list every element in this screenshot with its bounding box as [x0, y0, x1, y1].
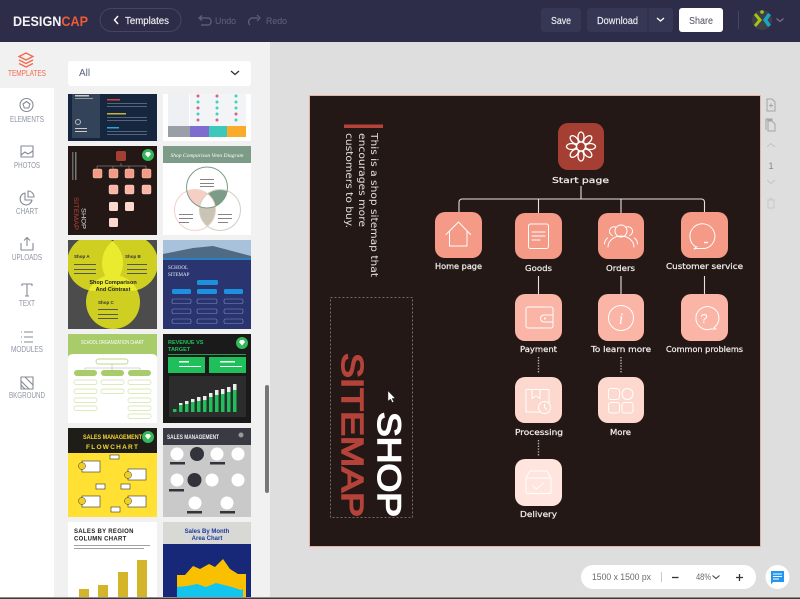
button: download — [587, 8, 673, 32]
button: undo — [199, 16, 236, 27]
title: SITEMAP: SITEMAP — [335, 353, 370, 517]
accent bar — [344, 124, 383, 128]
node: customer service — [666, 212, 743, 271]
button: share: Share — [689, 16, 713, 27]
bottom edge — [0, 598, 800, 599]
button: zoom out — [672, 576, 678, 578]
description text: encourages more — [356, 133, 367, 227]
template: sales management flowchart: SALES MANAGEMENT — [83, 434, 142, 441]
template: yellow shop comparison: Shop C — [98, 300, 114, 305]
nav: text: TEXT — [19, 299, 35, 308]
node: home page — [435, 212, 482, 271]
node: goods: Goods — [525, 264, 552, 273]
nav: text — [19, 284, 35, 308]
template: venn diagram: Shop Comparison Venn Diagram — [171, 153, 243, 159]
nav: templates: TEMPLATES — [8, 69, 46, 78]
nav: modules — [11, 332, 43, 354]
template: sales management gray: SALES MANAGEMENT — [167, 435, 219, 441]
template: sales management flowchart — [68, 428, 157, 517]
node: common problems — [666, 294, 743, 354]
nav: photos — [14, 146, 40, 170]
nav: background — [9, 377, 45, 400]
tool: duplicate page — [766, 119, 775, 131]
template: venn diagram — [163, 146, 251, 235]
nav: templates — [8, 53, 46, 78]
template: comparison table — [163, 94, 251, 141]
template: school organization chart — [68, 334, 157, 423]
nav: modules: MODULES — [11, 345, 43, 354]
node: processing: Processing — [515, 428, 563, 437]
nav: background: BKGROUND — [9, 391, 45, 400]
tool: delete page — [767, 198, 775, 208]
button: share — [679, 8, 723, 32]
node: common problems: ? — [700, 311, 708, 326]
template: sales by region column chart: SALES BY REGION — [74, 529, 134, 535]
node: goods — [515, 213, 562, 273]
template: sales by month area chart — [163, 522, 251, 597]
node: more: More — [610, 428, 631, 437]
template: sales by month area chart: Sales By Month — [185, 529, 230, 535]
node: home page: Home page — [435, 262, 482, 271]
node: orders — [598, 213, 644, 273]
template: yellow shop comparison: Shop A — [74, 254, 90, 259]
template: yellow shop comparison — [68, 240, 157, 329]
template: revenue vs target: REVENUE VS — [168, 340, 204, 346]
page number: 1 — [768, 161, 774, 172]
node: processing — [515, 377, 563, 437]
design canvas — [310, 96, 760, 546]
nav: photos: PHOTOS — [14, 161, 40, 170]
nav: uploads: UPLOADS — [12, 253, 42, 262]
button: zoom in — [736, 574, 743, 581]
template: school sitemap: SITEMAP — [168, 273, 190, 278]
button: save — [541, 8, 581, 32]
nav: elements: ELEMENTS — [10, 115, 44, 124]
user avatar — [752, 10, 784, 30]
sidebar navigation — [0, 42, 54, 597]
node: orders: Orders — [606, 264, 635, 273]
node: more — [598, 377, 644, 437]
node: payment — [515, 294, 562, 354]
chat button — [766, 565, 790, 589]
nav: elements — [10, 98, 44, 124]
filter dropdown: All — [79, 68, 90, 79]
button: redo — [249, 15, 287, 27]
template: shop sitemap thumbnail — [68, 146, 157, 235]
node: common problems: Common problems — [666, 345, 743, 354]
button: download: Download — [597, 15, 638, 27]
panel scrollbar — [265, 385, 269, 493]
template: yellow shop comparison: Shop B — [125, 254, 141, 259]
node: start page — [552, 123, 609, 185]
selection box — [330, 298, 412, 518]
tool: page down — [767, 180, 775, 184]
icon: flower — [566, 132, 596, 161]
button: back to templates — [100, 8, 181, 32]
template: shop sitemap thumbnail: SHOP — [80, 208, 86, 229]
template: dark navy — [68, 94, 157, 141]
template: sales management flowchart: FLOWCHART — [86, 444, 138, 451]
zoom control — [581, 565, 756, 589]
button: undo: Undo — [215, 16, 236, 27]
button: redo: Redo — [266, 16, 287, 27]
filter dropdown — [68, 61, 251, 86]
node: to learn more: To learn more — [590, 345, 651, 354]
nav: uploads — [12, 238, 42, 262]
template: sales by region column chart: COLUMN CHART — [74, 536, 127, 542]
template: revenue vs target — [163, 334, 251, 423]
template: sales by month area chart: Area Chart — [192, 536, 222, 542]
top bar — [0, 0, 800, 42]
template: sales management gray — [163, 428, 251, 517]
node: delivery: Delivery — [520, 510, 557, 519]
connector lines — [459, 186, 704, 456]
canvas tools — [766, 99, 775, 208]
template: school sitemap: SCHOOL — [168, 266, 188, 271]
template: yellow shop comparison: Shop Comparison — [89, 280, 137, 286]
node: delivery — [515, 459, 562, 519]
logo: DesignCap: DESIGNCAP — [13, 13, 88, 29]
button: back to templates: Templates — [125, 15, 169, 27]
template: sales by region column chart — [68, 522, 157, 597]
node: to learn more: i — [619, 311, 623, 328]
mouse cursor — [388, 391, 395, 402]
template: shop sitemap thumbnail: SITEMAP — [72, 197, 79, 230]
title: SHOP: SHOP — [371, 412, 407, 517]
button: save: Save — [551, 16, 571, 27]
template: yellow shop comparison: And Contrast — [96, 287, 131, 293]
description text — [343, 132, 379, 277]
description text: customers to buy. — [343, 133, 354, 228]
node: start page: Start page — [552, 176, 609, 185]
nav: chart: CHART — [16, 207, 38, 216]
zoom control: 1500 x 1500 px — [592, 572, 651, 583]
template panel — [54, 42, 270, 597]
tool: page up — [767, 144, 775, 147]
node: customer service: Customer service — [666, 262, 743, 271]
tool: add page — [767, 99, 775, 111]
template: revenue vs target: TARGET — [168, 347, 191, 353]
template: school sitemap — [163, 240, 251, 329]
zoom control: 48% — [696, 572, 711, 583]
nav: chart — [16, 191, 38, 216]
node: to learn more — [590, 294, 651, 354]
node: payment: Payment — [520, 345, 557, 354]
description text: This is a shop sitemap that — [368, 132, 379, 277]
